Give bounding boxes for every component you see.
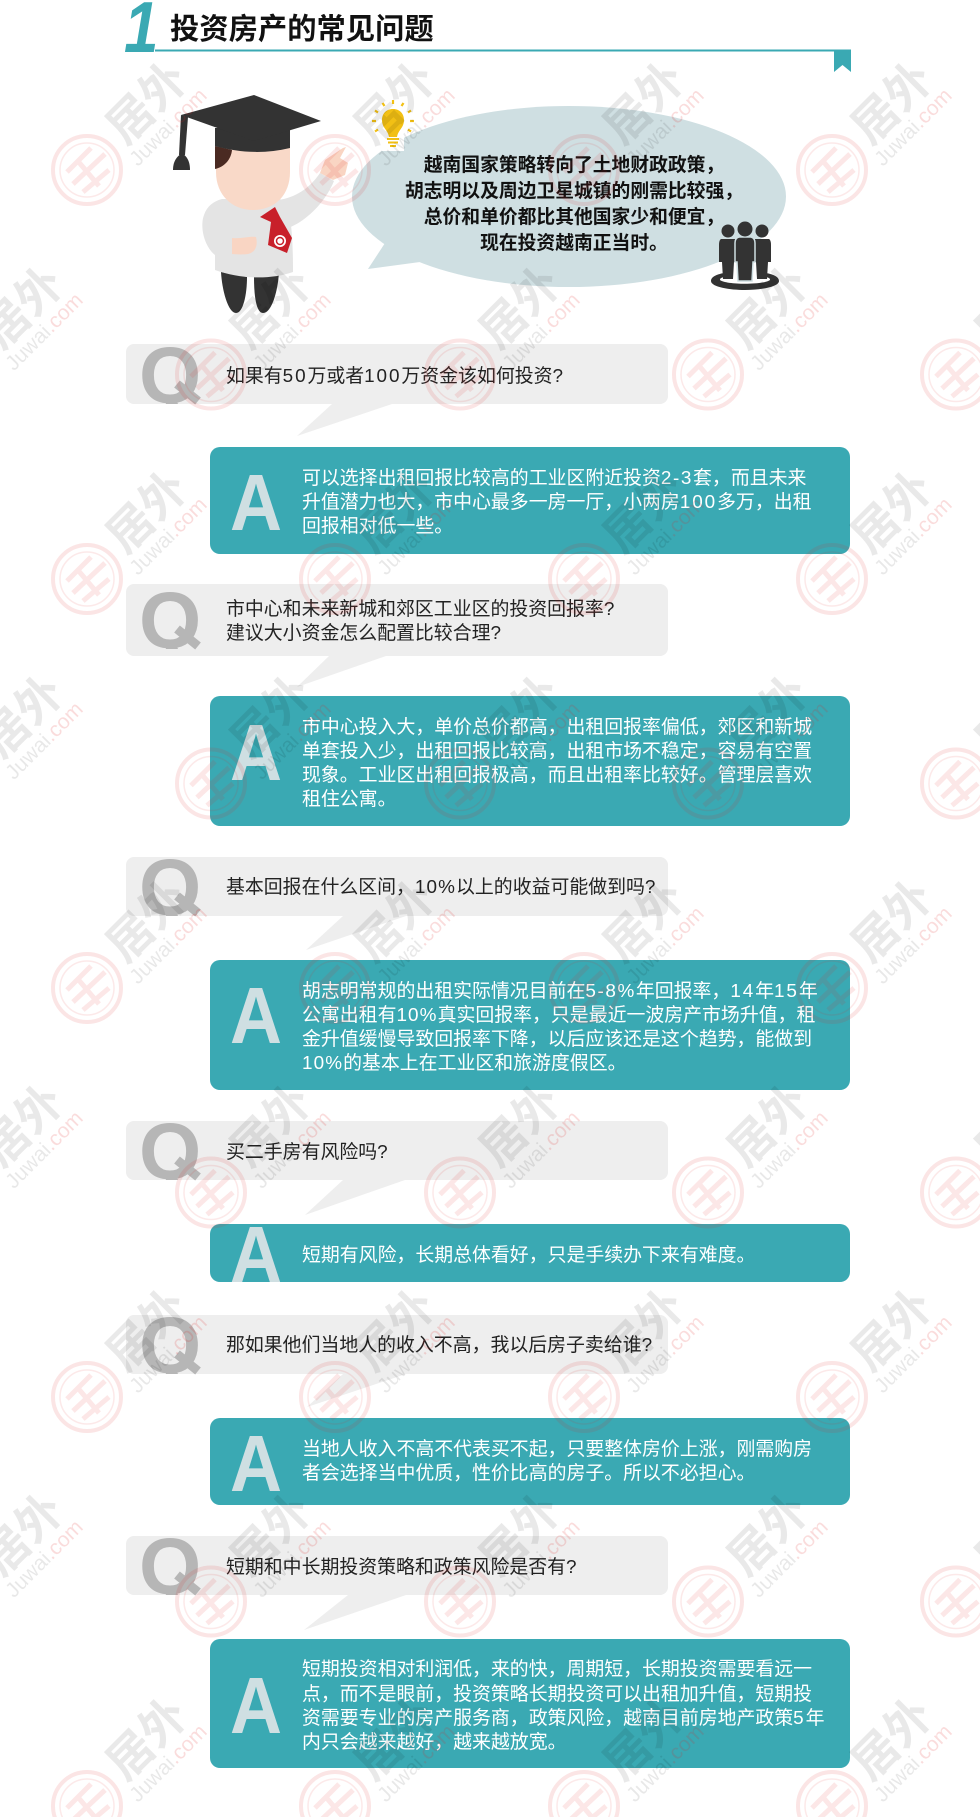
- panel: question 2: 建议大小资金怎么配置比较合理?: [226, 622, 501, 644]
- bubble text: 现在投资越南正当时。: [480, 232, 668, 253]
- text: Juwai.com: [622, 1720, 709, 1807]
- text: Juwai.com: [249, 1107, 336, 1193]
- text: 居外: [593, 1688, 695, 1790]
- panel: question 4: [126, 1107, 668, 1215]
- panel: question 3: Q: [139, 843, 201, 932]
- text: 居外: [717, 256, 819, 358]
- panel: answer 4: A: [230, 1211, 282, 1300]
- panel: answer 5: 者会选择当中优质，性价比高的房子。所以不必担心。: [302, 1462, 755, 1484]
- text: Juwai.com: [1, 1107, 88, 1193]
- text: Juwai.com: [622, 84, 709, 171]
- speech bubble: [352, 106, 786, 287]
- panel: answer 2: A: [230, 709, 282, 798]
- bubble text: 总价和单价都比其他国家少和便宜，: [424, 205, 724, 227]
- text: 居外: [344, 52, 446, 154]
- text: 居外: [469, 1074, 571, 1176]
- text: 居外: [717, 665, 819, 767]
- text: Juwai.com: [373, 1311, 460, 1398]
- text: Juwai.com: [373, 902, 460, 989]
- panel: answer 3: A: [230, 972, 282, 1061]
- panel: answer 5: A: [230, 1420, 282, 1509]
- text: Juwai.com: [1, 1516, 88, 1602]
- panel: answer 5: 当地人收入不高不代表买不起，只要整体房价上涨，刚需购房: [302, 1438, 812, 1460]
- icon: light bulb: [372, 100, 414, 149]
- text: 居外: [344, 1688, 446, 1790]
- panel: answer 1: 可以选择出租回报比较高的工业区附近投资2-3套，而且未来: [302, 468, 806, 489]
- panel: question 3: [126, 843, 668, 950]
- text: Juwai.com: [622, 902, 709, 989]
- text: 居外: [96, 52, 198, 154]
- panel: answer 4: [210, 1211, 850, 1300]
- panel: question 6: 短期和中长期投资策略和政策风险是否有?: [226, 1556, 577, 1578]
- panel: question 2: Q: [139, 576, 201, 665]
- text: Juwai.com: [746, 698, 833, 784]
- text: 居外: [841, 1279, 943, 1381]
- text: 居外: [469, 665, 571, 767]
- text: Juwai.com: [498, 1107, 585, 1193]
- text: Juwai.com: [870, 84, 957, 171]
- text: 居外: [344, 1279, 446, 1381]
- panel: answer 3: 金升值缓慢导致回报率下降，以后应该还是这个趋势，能做到: [302, 1028, 812, 1050]
- panel: answer 2: [210, 696, 850, 826]
- panel: answer 6: A: [230, 1662, 282, 1751]
- text: Juwai.com: [870, 1720, 957, 1807]
- panel: question 4: Q: [139, 1107, 201, 1196]
- text: Juwai.com: [870, 493, 957, 580]
- text: 居外: [469, 256, 571, 358]
- panel: question 5: 那如果他们当地人的收入不高，我以后房子卖给谁?: [226, 1334, 652, 1356]
- text: Juwai.com: [373, 493, 460, 580]
- text: 居外: [96, 1279, 198, 1381]
- panel: answer 6: 点，而不是眼前，投资策略长期投资可以出租加升值，短期投: [302, 1683, 812, 1705]
- text: Juwai.com: [125, 1311, 212, 1398]
- text: Juwai.com: [373, 1720, 460, 1807]
- panel: question 6: [126, 1522, 668, 1630]
- text: 居外: [841, 52, 943, 154]
- text: 居外: [220, 665, 322, 767]
- text: 居外: [220, 1074, 322, 1176]
- text: Juwai.com: [125, 84, 212, 171]
- text: Juwai.com: [498, 698, 585, 784]
- text: 居外: [96, 1688, 198, 1790]
- text: Juwai.com: [622, 493, 709, 580]
- text: 居外: [593, 52, 695, 154]
- bubble text: 越南国家策略转向了土地财政政策，: [424, 153, 724, 175]
- heading rule with ribbon: [155, 50, 851, 72]
- text: Juwai.com: [125, 493, 212, 580]
- text: Juwai.com: [746, 289, 833, 375]
- panel: question 5: Q: [139, 1301, 201, 1390]
- panel: question 5: [126, 1301, 668, 1407]
- panel: answer 2: 现象。工业区出租回报极高，而且出租率比较好。管理层喜欢: [302, 764, 812, 786]
- panel: answer 1: A: [230, 459, 282, 548]
- text: 居外: [469, 1483, 571, 1585]
- text: 居外: [220, 1483, 322, 1585]
- text: 居外: [841, 461, 943, 563]
- panel: answer 3: 公寓出租有10%真实回报率，只是最近一波房产市场升值，租: [302, 1005, 815, 1026]
- panel: question 3: 基本回报在什么区间，10%以上的收益可能做到吗?: [226, 876, 655, 898]
- bubble text: 胡志明以及周边卫星城镇的刚需比较强，: [405, 179, 743, 201]
- panel: answer 2: 单套投入少，出租回报比较高，出租市场不稳定，容易有空置: [302, 740, 812, 762]
- text: 居外: [841, 870, 943, 972]
- text: 居外: [344, 461, 446, 563]
- panel: question 2: [126, 576, 668, 687]
- text: Juwai.com: [125, 902, 212, 989]
- text: Juwai.com: [249, 1516, 336, 1602]
- text: Juwai.com: [125, 1720, 212, 1807]
- panel: answer 2: 市中心投入大，单价总价都高，出租回报率偏低，郊区和新城: [302, 716, 812, 738]
- text: Juwai.com: [498, 289, 585, 375]
- panel: answer 6: [210, 1639, 850, 1768]
- text: 居外: [717, 1483, 819, 1585]
- panel: question 1: 如果有50万或者100万资金该如何投资?: [226, 365, 563, 387]
- text: Juwai.com: [746, 1516, 833, 1602]
- panel: answer 5: [210, 1418, 850, 1509]
- panel: answer 6: 短期投资相对利润低，来的快，周期短，长期投资需要看远一: [302, 1658, 812, 1680]
- panel: answer 1: [210, 447, 850, 554]
- text: Juwai.com: [373, 84, 460, 171]
- text: Juwai.com: [249, 289, 336, 375]
- text: 居外: [96, 870, 198, 972]
- text: Juwai.com: [1, 698, 88, 784]
- panel: question 1: Q: [139, 331, 201, 420]
- panel: answer 1: 升值潜力也大，市中心最多一房一厅，小两房100多万，出租: [302, 492, 811, 513]
- text: Juwai.com: [870, 1311, 957, 1398]
- text: Juwai.com: [1, 289, 88, 375]
- panel: answer 3: 胡志明常规的出租实际情况目前在5-8%年回报率，14年15年: [302, 981, 818, 1002]
- panel: answer 4: 短期有风险，长期总体看好，只是手续办下来有难度。: [302, 1244, 755, 1266]
- title: 投资房产的常见问题: [170, 13, 434, 46]
- text: Juwai.com: [622, 1311, 709, 1398]
- panel: answer 6: 资需要专业的房产服务商，政策风险，越南目前房地产政策5年: [302, 1708, 824, 1729]
- panel: question 2: 市中心和未来新城和郊区工业区的投资回报率?: [226, 598, 614, 620]
- panel: answer 3: 10%的基本上在工业区和旅游度假区。: [302, 1053, 626, 1074]
- text: 居外: [344, 870, 446, 972]
- text: 居外: [593, 1279, 695, 1381]
- text: 居外: [593, 870, 695, 972]
- panel: answer 3: [210, 960, 850, 1090]
- text: Juwai.com: [498, 1516, 585, 1602]
- panel: answer 1: 回报相对低一些。: [302, 515, 453, 537]
- panel: question 6: Q: [139, 1522, 201, 1611]
- text: Juwai.com: [746, 1107, 833, 1193]
- text: 居外: [593, 461, 695, 563]
- text: 居外: [717, 1074, 819, 1176]
- text: 居外: [841, 1688, 943, 1790]
- panel: answer 6: 内只会越来越好，越来越放宽。: [302, 1731, 566, 1753]
- text: 居外: [220, 256, 322, 358]
- panel: answer 2: 租住公寓。: [302, 788, 396, 810]
- text: Juwai.com: [870, 902, 957, 989]
- panel: question 1: [126, 331, 668, 436]
- icon: graduate character: [173, 95, 348, 313]
- text: Juwai.com: [249, 698, 336, 784]
- panel: question 4: 买二手房有风险吗?: [226, 1141, 388, 1163]
- section heading: [124, 0, 851, 72]
- icon: group of people: [709, 222, 781, 292]
- text: 居外: [96, 461, 198, 563]
